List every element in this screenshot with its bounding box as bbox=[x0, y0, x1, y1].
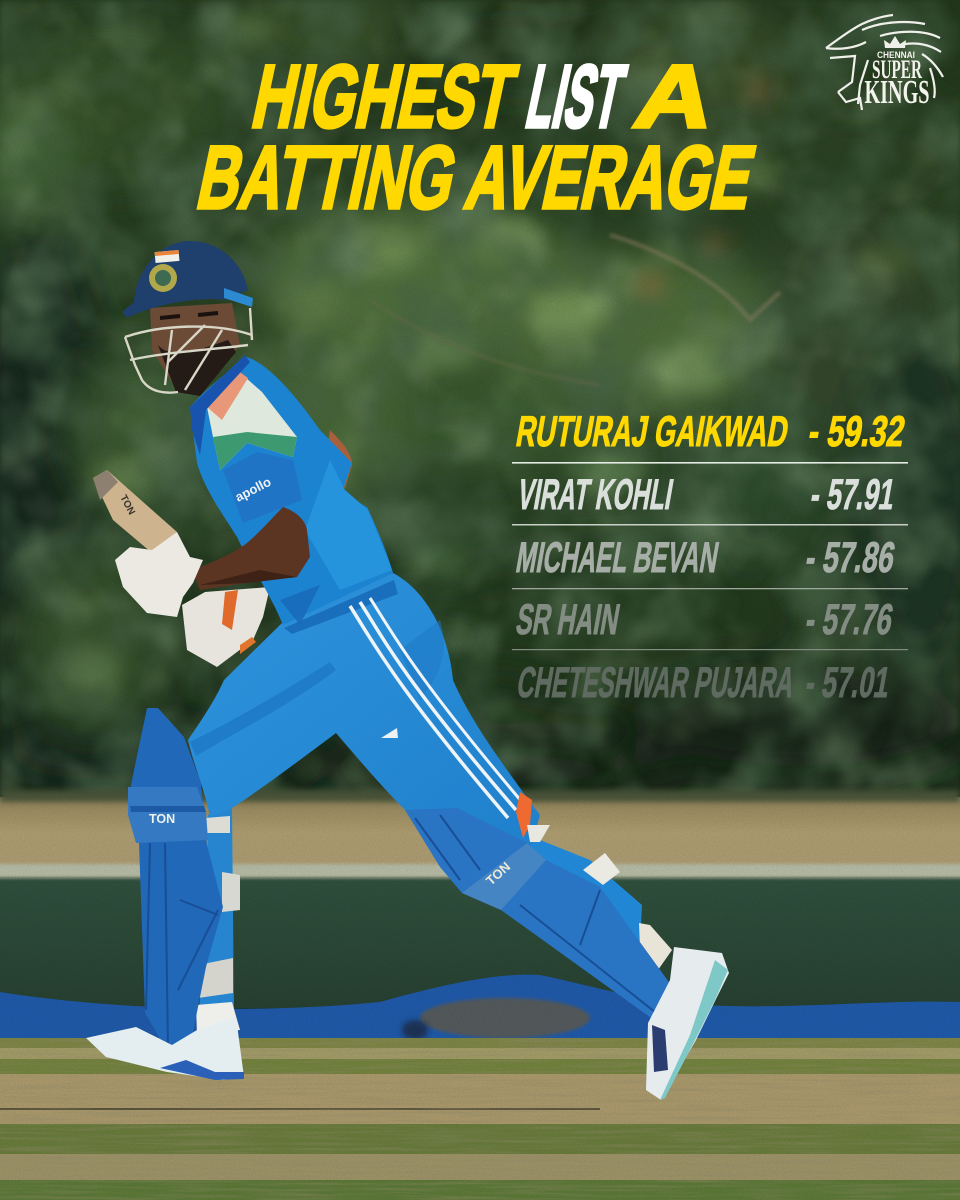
player photo stand-in bbox=[86, 241, 729, 1100]
title line 1: A bbox=[627, 48, 724, 147]
bat bbox=[93, 470, 240, 648]
shirt bbox=[190, 357, 393, 625]
title bbox=[190, 48, 763, 228]
title line 1: HIGHEST bbox=[245, 48, 524, 147]
front leg pad bbox=[128, 708, 223, 1057]
logo: Chennai Super Kings bbox=[826, 15, 943, 111]
divider 2 bbox=[512, 524, 908, 526]
title line 1: LIST bbox=[519, 48, 633, 147]
logo lion mane bbox=[826, 15, 943, 110]
sleeve bbox=[223, 452, 302, 523]
row 2: Virat Kohli: VIRAT KOHLI bbox=[514, 471, 677, 519]
rear leg pad bbox=[405, 808, 687, 1028]
leaderboard bbox=[512, 408, 909, 707]
photo background: pitch strips bbox=[0, 1038, 960, 1200]
face bbox=[150, 303, 240, 392]
row 1: Ruturaj Gaikwad: RUTURAJ GAIKWAD bbox=[513, 408, 792, 456]
divider 3 bbox=[512, 588, 908, 589]
photo background: outfield, boundary wall and covers bbox=[0, 790, 960, 1042]
front leg pad: TON bbox=[149, 812, 175, 826]
adidas mark bbox=[381, 728, 398, 738]
row 1: Ruturaj Gaikwad: - 59.32 bbox=[805, 408, 909, 456]
left shoe bbox=[86, 1017, 244, 1080]
arm bbox=[192, 507, 310, 590]
trousers bbox=[188, 573, 540, 850]
rear leg pad: TON bbox=[483, 859, 513, 888]
row 4: SR Hain bbox=[513, 596, 897, 644]
divider 1 bbox=[512, 462, 908, 464]
logo wordmark: SUPER bbox=[872, 55, 922, 84]
rear sock and shin bbox=[520, 836, 642, 945]
front lower leg bbox=[198, 808, 234, 1015]
row 4: SR Hain: - 57.76 bbox=[802, 596, 897, 644]
sponsor text: apollo bbox=[233, 474, 274, 505]
photo background: blurred foliage bbox=[0, 0, 960, 800]
orange flap bbox=[516, 792, 532, 838]
pad strap bbox=[583, 853, 620, 885]
logo wordmark bbox=[864, 50, 930, 111]
row 3: Michael Bevan: - 57.86 bbox=[802, 534, 899, 582]
shirt tricolour shoulder panel bbox=[207, 370, 297, 470]
row 2: Virat Kohli: - 57.91 bbox=[807, 471, 899, 519]
trouser stripes bbox=[350, 598, 522, 818]
row 3: Michael Bevan: MICHAEL BEVAN bbox=[513, 534, 722, 582]
top glove bbox=[115, 532, 203, 617]
back arm bbox=[325, 430, 352, 488]
divider 4 bbox=[512, 649, 908, 650]
logo crown bbox=[884, 36, 906, 48]
row 4: SR Hain: SR HAIN bbox=[513, 596, 623, 644]
collar bbox=[190, 355, 250, 455]
helmet bbox=[122, 241, 253, 318]
row 5: Cheteshwar Pujara: - 57.01 bbox=[802, 659, 894, 707]
lower glove bbox=[182, 587, 270, 667]
helmet grille bbox=[125, 308, 252, 393]
logo wordmark: CHENNAI bbox=[877, 50, 915, 61]
bat: TON bbox=[117, 493, 137, 517]
right shoe bbox=[646, 947, 729, 1100]
